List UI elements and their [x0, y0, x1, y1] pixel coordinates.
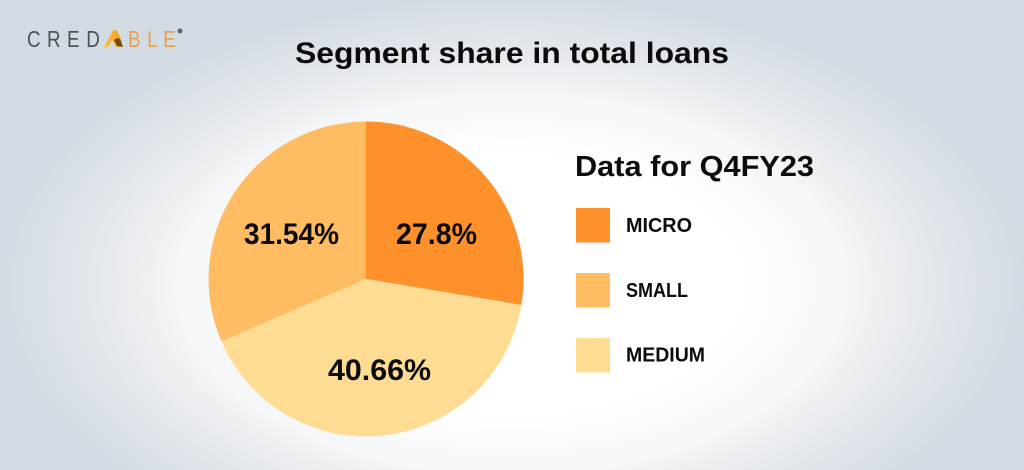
- logo: Credable: BLE: [128, 26, 176, 53]
- legend item: micro: [576, 208, 692, 242]
- legend: [575, 151, 814, 372]
- legend item: small: [576, 273, 688, 308]
- slice: micro 27.8%: [366, 121, 524, 305]
- legend item: medium: [576, 338, 705, 372]
- slice: medium 40.66%: [221, 279, 521, 437]
- pie chart: [209, 121, 524, 437]
- legend item: small: SMALL: [626, 280, 688, 302]
- label: 27.8%: 27.8%: [396, 218, 477, 251]
- legend heading: Data for Q4FY23: [575, 151, 814, 183]
- legend item: micro: MICRO: [626, 215, 692, 237]
- legend item: medium: MEDIUM: [626, 344, 705, 366]
- label: 31.54%: 31.54%: [244, 218, 339, 251]
- label: 40.66%: 40.66%: [328, 354, 431, 387]
- logo: Credable: [27, 26, 182, 53]
- title: Segment share in total loans: [295, 37, 729, 70]
- slice: small 31.54%: [209, 122, 366, 341]
- logo: Credable: CRED: [27, 26, 100, 53]
